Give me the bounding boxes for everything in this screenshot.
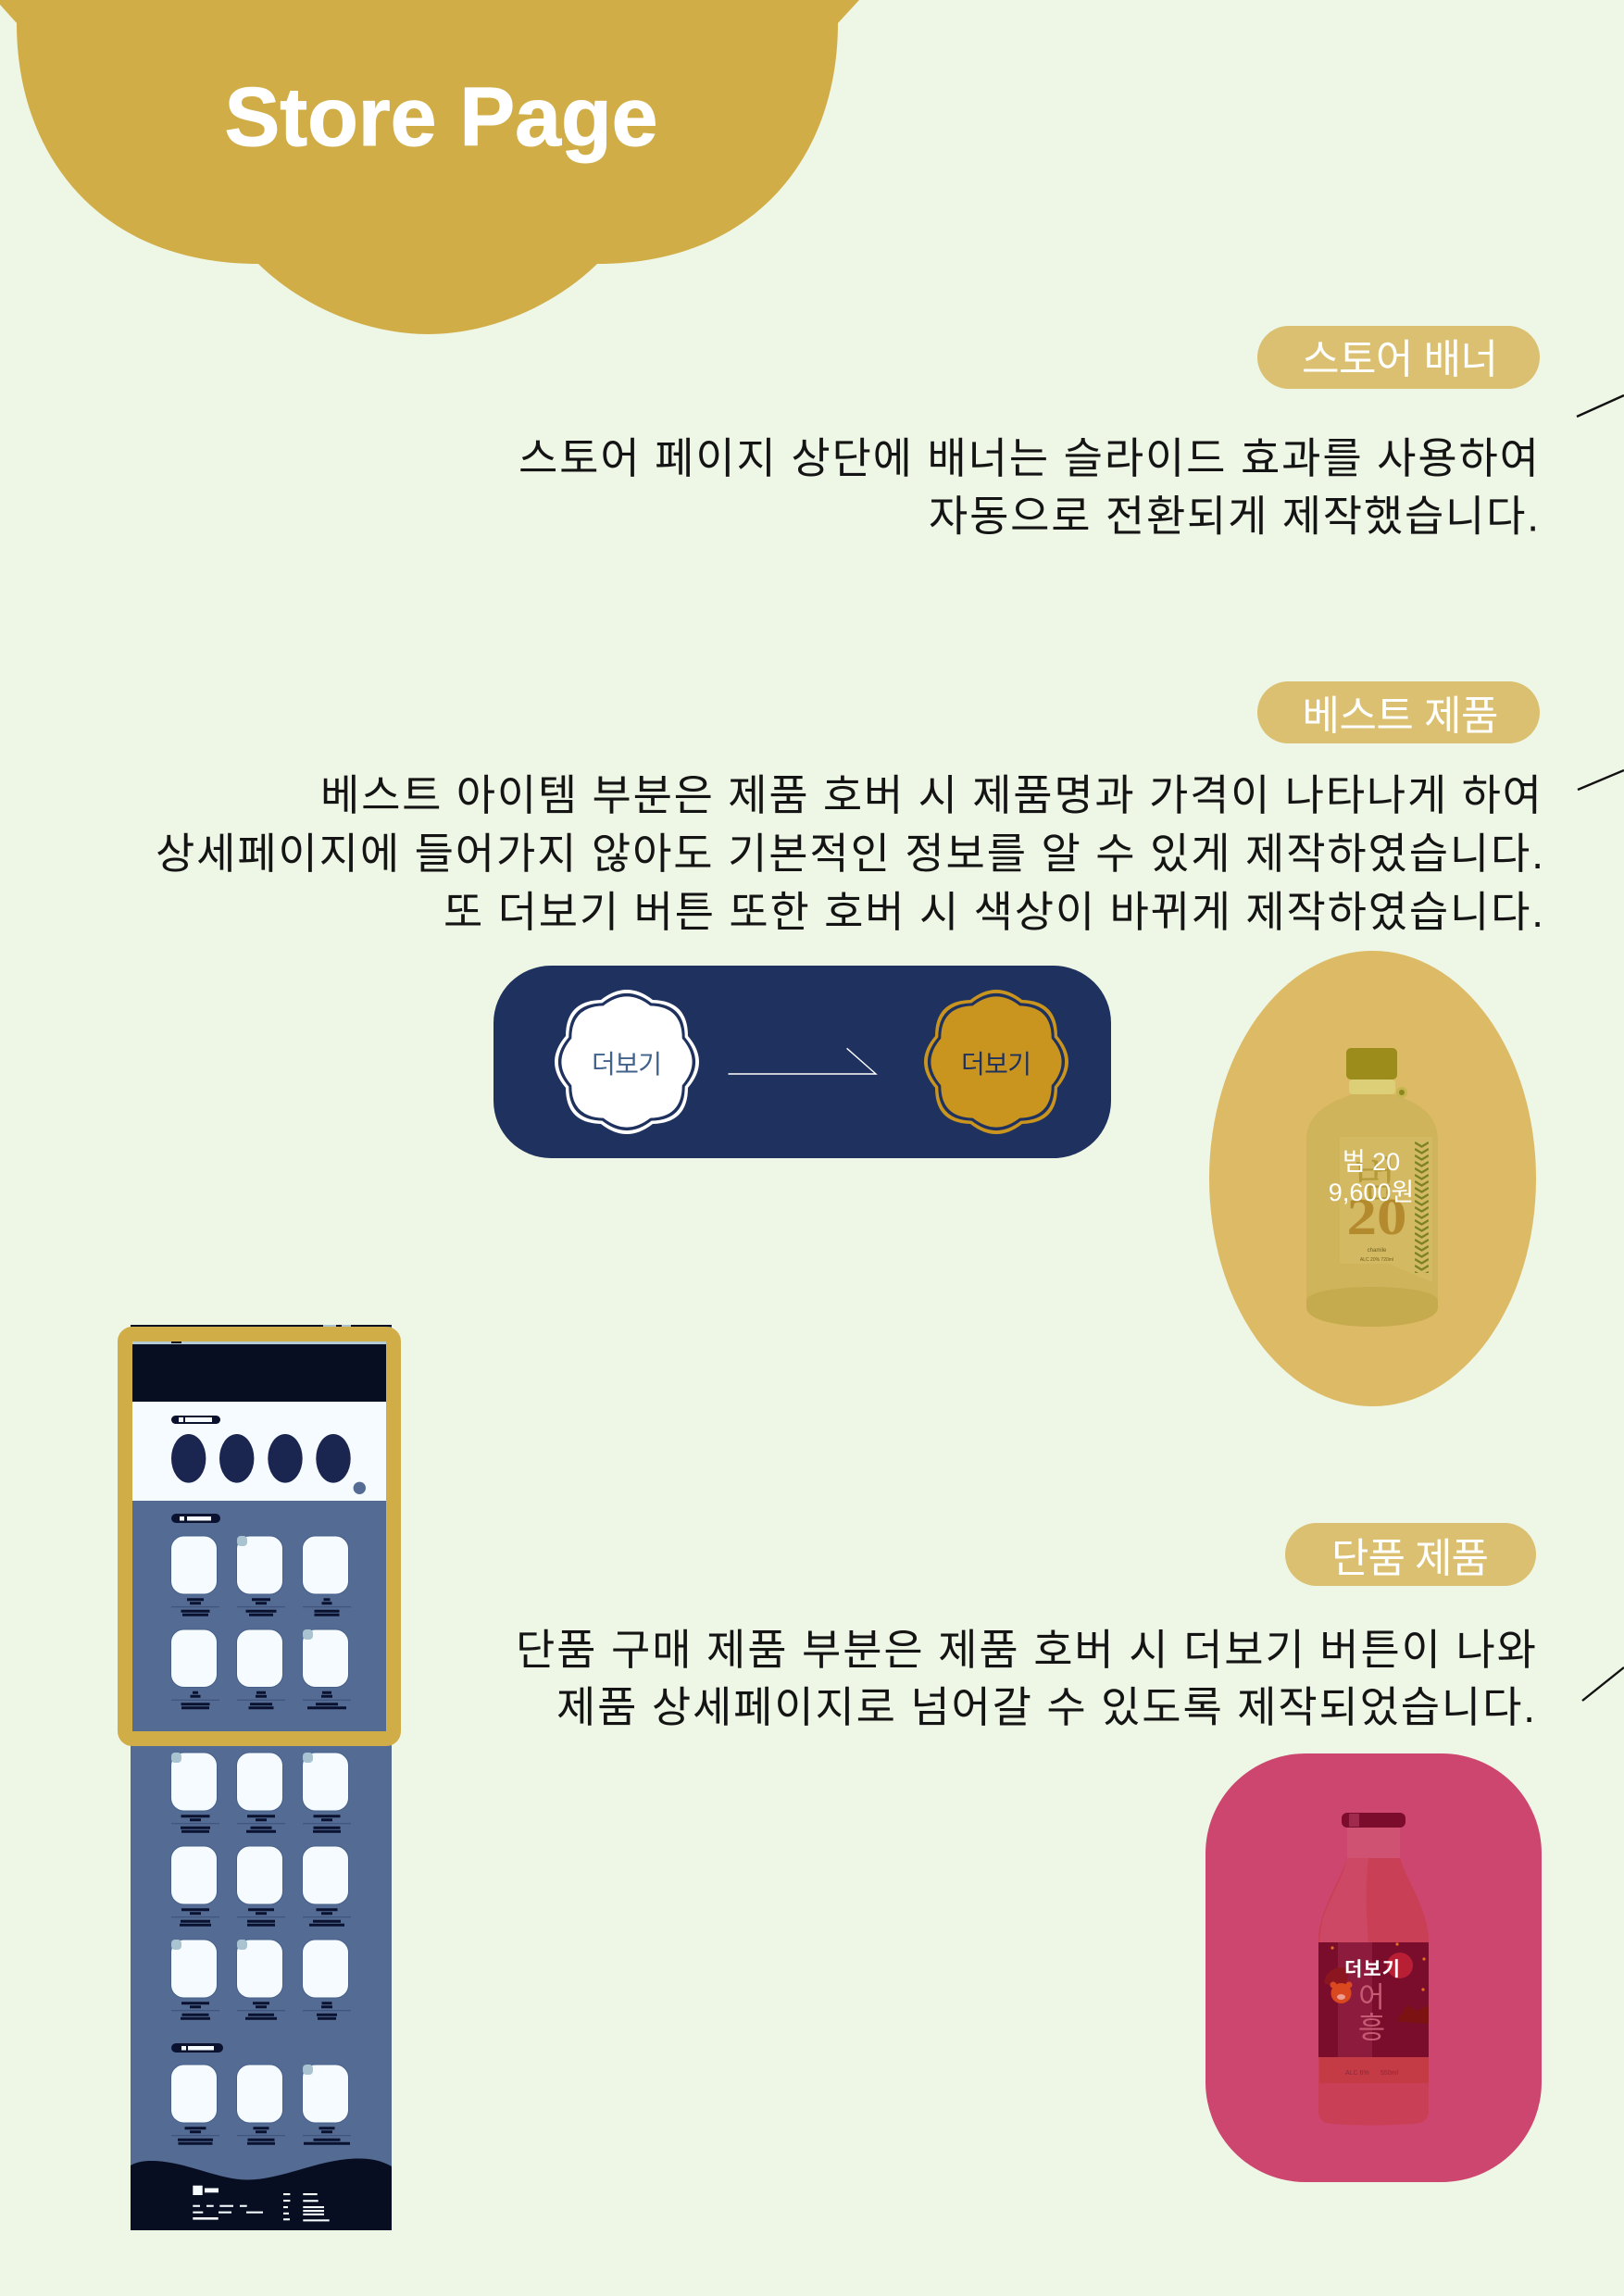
bottle illustration: chamile	[1368, 1248, 1387, 1254]
description: best products: 또 더보기 버튼 또한 호버 시 색상이 바뀌게 제작하였습니다.	[443, 888, 1543, 936]
footer placeholder text	[193, 2186, 330, 2221]
description: single products	[516, 1626, 1536, 1731]
bottle illustration: ALC 6%	[1345, 2070, 1369, 2077]
bottle illustration	[1306, 1048, 1438, 1327]
section: store banner	[518, 326, 1540, 541]
pill heading: best products	[1257, 681, 1540, 743]
highlight frame	[125, 1334, 394, 1739]
bottle illustration: 어	[1358, 1981, 1385, 2014]
panel: more-button hover states	[493, 966, 1111, 1158]
product badges	[171, 1536, 313, 2075]
description: single products: 제품 상세페이지로 넘어갈 수 있도록 제작되었습니다.	[556, 1683, 1535, 1731]
description: store banner: 자동으로 전환되게 제작했습니다.	[929, 493, 1539, 541]
hover text: product name and price: 9,600원	[1329, 1179, 1414, 1206]
hover text: more button: 더보기	[1344, 1959, 1400, 1980]
description: single products: 단품 구매 제품 부분은 제품 호버 시 더보기 버튼이 나와	[516, 1626, 1536, 1674]
product name and price placeholders	[178, 1600, 350, 2143]
leader line: single products	[1582, 1667, 1624, 1701]
bottle illustration: 20	[1346, 1189, 1407, 1246]
hover text: product name and price: 범 20	[1343, 1148, 1400, 1176]
bottle illustration: 흥	[1358, 2011, 1385, 2044]
button: hover state: 더보기	[961, 1050, 1031, 1079]
product hover: rounded card with bottle	[1206, 1753, 1542, 2182]
arrow	[728, 1048, 876, 1074]
pill heading: store banner: 스토어 배너	[1302, 337, 1498, 382]
pill heading: best products: 베스트 제품	[1302, 693, 1498, 739]
description: store banner: 스토어 페이지 상단에 배너는 슬라이드 효과를 사용하여	[518, 434, 1539, 482]
section: single products	[516, 1523, 1536, 1731]
banner area	[132, 1341, 386, 1402]
description: store banner	[518, 434, 1539, 541]
button: hover state	[924, 990, 1068, 1134]
bottle illustration: 범	[1353, 1154, 1397, 1206]
bottle illustration: ALC 20% 720ml	[1360, 1257, 1393, 1263]
product heading pill one	[171, 1514, 220, 1523]
description: best products: 상세페이지에 들어가지 않아도 기본적인 정보를 알 수 있게 제작하였습니다.	[156, 830, 1543, 878]
title: Store Page	[224, 71, 657, 164]
product grid	[170, 1536, 348, 2123]
bottle illustration	[1318, 1813, 1429, 2126]
product hover: oval with bottle	[1209, 951, 1536, 1406]
button: default state	[555, 990, 699, 1134]
section: best products	[156, 681, 1543, 936]
screenshot background	[131, 1325, 392, 2230]
leader line: store banner	[1577, 395, 1624, 417]
pill heading: store banner	[1257, 326, 1540, 389]
description: best products	[156, 771, 1543, 936]
pill heading: single products: 단품 제품	[1331, 1536, 1489, 1581]
header: scalloped title shape	[0, 0, 859, 334]
pill heading: single products	[1285, 1523, 1536, 1586]
description: best products: 베스트 아이템 부분은 제품 호버 시 제품명과 가격이 나타나게 하여	[320, 771, 1542, 819]
leader line: best products	[1578, 770, 1624, 790]
bottle illustration: 550ml	[1380, 2070, 1399, 2077]
footer wave	[131, 2159, 392, 2230]
product heading pill two	[171, 2043, 223, 2053]
button: default state: 더보기	[592, 1050, 662, 1079]
hover text: product name and price	[1329, 1148, 1414, 1206]
best items area	[132, 1402, 386, 1501]
store page screenshot	[125, 1325, 394, 2230]
